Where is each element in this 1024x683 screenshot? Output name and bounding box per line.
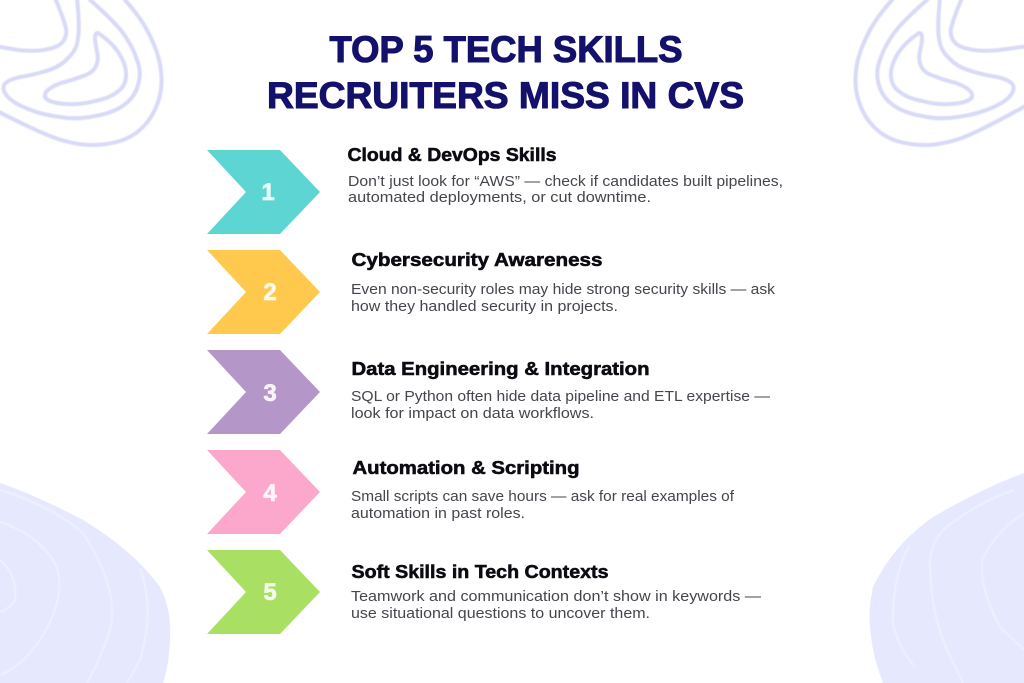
icon: green chevron number 5: 5: [263, 579, 277, 606]
heading: cloud and devops skills: Cloud & DevOps Skills: [348, 144, 556, 165]
text block: cybersecurity description: how they handled security in projects.: [351, 299, 618, 315]
text block: data description: look for impact on data workflows.: [351, 406, 594, 422]
icon: green chevron number 5: [207, 550, 320, 634]
text block: data description: SQL or Python often hide data pipeline and ETL expertise —: [351, 389, 771, 405]
decoration: bottom-left blob: [0, 483, 170, 683]
text block: cybersecurity description: [351, 282, 776, 315]
icon: purple chevron number 3: 3: [263, 380, 277, 407]
heading: soft skills in tech contexts: Soft Skills in Tech Contexts: [352, 561, 608, 582]
decoration: top-right contour lines: [855, 0, 1024, 145]
text block: cybersecurity description: Even non-security roles may hide strong security skills — ask: [351, 282, 776, 298]
item 3: data engineering: [207, 350, 771, 434]
title: RECRUITERS MISS IN CVS: [267, 74, 744, 116]
text block: automation description: [351, 489, 735, 522]
text block: soft skills description: Teamwork and communication don’t show in keywords —: [351, 589, 762, 605]
heading: data engineering and integration: Data Engineering & Integration: [352, 358, 650, 379]
decoration: bottom-right blob: [869, 473, 1024, 683]
heading: cybersecurity awareness: Cybersecurity Awareness: [352, 249, 602, 270]
title: [267, 28, 744, 116]
heading: automation and scripting: Automation & Scripting: [352, 457, 580, 478]
text block: data description: [351, 389, 771, 422]
text block: automation description: automation in past roles.: [351, 506, 525, 522]
item 1: cloud and devops: [207, 144, 783, 234]
icon: pink chevron number 4: [207, 450, 320, 534]
icon: yellow chevron number 2: 2: [263, 279, 277, 306]
text block: soft skills description: use situational questions to uncover them.: [351, 606, 650, 622]
icon: pink chevron number 4: 4: [263, 480, 277, 507]
text block: automation description: Small scripts can save hours — ask for real examples of: [351, 489, 735, 505]
decoration: top-left contour lines: [0, 0, 162, 145]
text block: cloud description: automated deployments, or cut downtime.: [348, 190, 651, 206]
item 5: soft skills: [207, 550, 762, 634]
icon: yellow chevron number 2: [207, 250, 320, 334]
icon: teal chevron number 1: 1: [261, 179, 275, 206]
text block: cloud description: [348, 174, 783, 206]
icon: teal chevron number 1: [207, 150, 320, 234]
item 2: cybersecurity: [207, 249, 776, 334]
text block: cloud description: Don’t just look for “AWS” — check if candidates built pipelines,: [348, 174, 783, 190]
title: TOP 5 TECH SKILLS: [330, 28, 682, 70]
icon: purple chevron number 3: [207, 350, 320, 434]
item 4: automation: [207, 450, 735, 534]
text block: soft skills description: [351, 589, 762, 622]
